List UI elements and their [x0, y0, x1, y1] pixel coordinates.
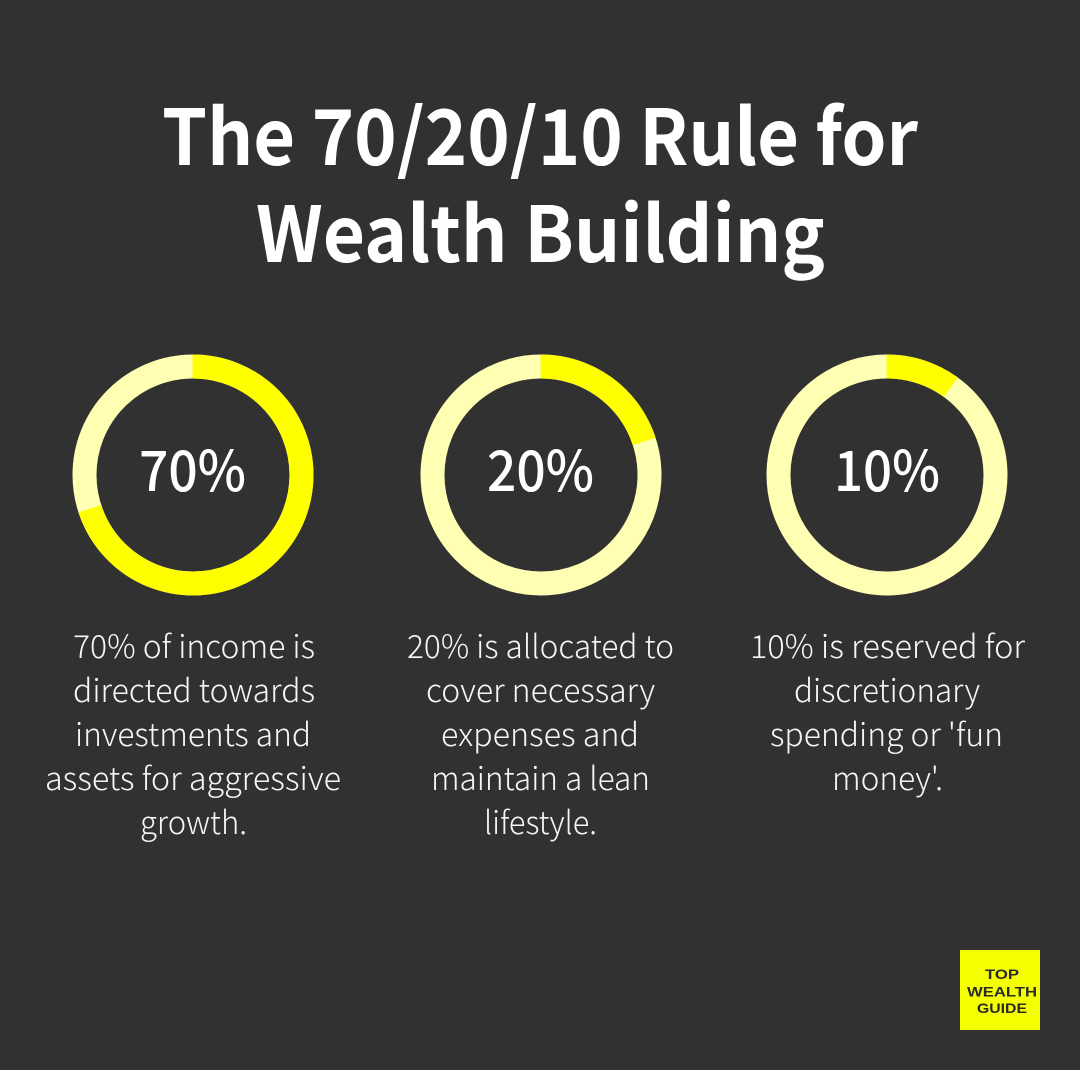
- text: 20 percent description: 20% is allocated to: [407, 622, 674, 668]
- logo: Top Wealth Guide: [960, 950, 1040, 1030]
- text: 10 percent description: money'.: [832, 754, 943, 800]
- panel: 10 percent: [750, 366, 1026, 800]
- text: 10 percent description: [750, 622, 1026, 800]
- donut chart: 70%: 70%: [139, 427, 246, 508]
- panel: 20 percent: [407, 366, 674, 844]
- text: 70 percent description: growth.: [140, 798, 247, 844]
- donut chart: 20%: 20%: [487, 427, 594, 508]
- text: 70 percent description: [45, 622, 341, 844]
- text: 70 percent description: directed towards: [73, 666, 315, 712]
- logo: Top Wealth Guide: WEALTH: [967, 984, 1037, 1000]
- text: 10 percent description: discretionary: [794, 666, 980, 712]
- text: 20 percent description: expenses and: [441, 710, 639, 756]
- text: 70 percent description: assets for aggressive: [45, 754, 341, 800]
- donut chart: 20%: [432, 366, 650, 584]
- panel: 70 percent: [45, 366, 341, 844]
- donut chart: 10%: 10%: [834, 427, 940, 508]
- text: 10 percent description: 10% is reserved for: [750, 622, 1026, 668]
- text: 20 percent description: lifestyle.: [484, 798, 597, 844]
- text: 20 percent description: [407, 622, 674, 844]
- donut chart: 10%: [778, 366, 996, 584]
- logo: Top Wealth Guide: TOP: [985, 967, 1019, 982]
- text: 70 percent description: 70% of income is: [73, 622, 315, 668]
- text: 70 percent description: investments and: [75, 710, 311, 756]
- title: The 70/20/10 Rule for: [162, 77, 918, 188]
- donut chart: 70%: [84, 366, 302, 584]
- text: 20 percent description: maintain a lean: [431, 754, 650, 800]
- title: [162, 77, 918, 285]
- text: 10 percent description: spending or 'fun: [770, 710, 1003, 756]
- text: 20 percent description: cover necessary: [426, 666, 655, 712]
- logo: Top Wealth Guide: GUIDE: [977, 1001, 1027, 1016]
- title: Wealth Building: [256, 174, 825, 285]
